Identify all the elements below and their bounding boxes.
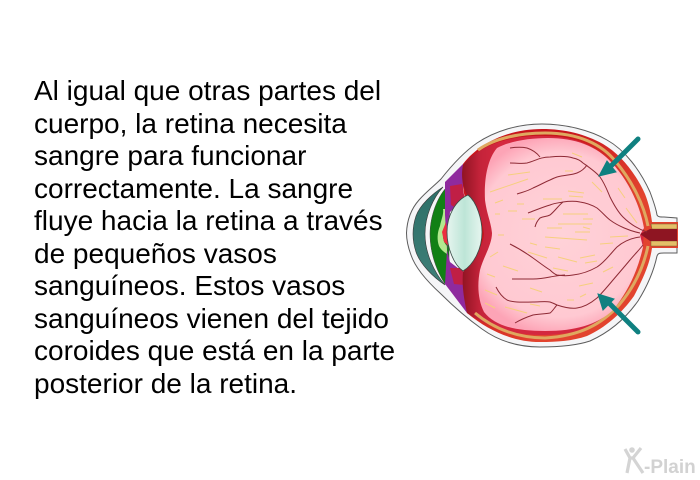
- lens: [447, 195, 482, 271]
- body text paragraph: de pequeños vasos: [34, 238, 277, 268]
- fatty yellow streaks: [485, 153, 637, 313]
- ciliary body purple: [445, 164, 467, 313]
- lower ciliary muscle: [450, 268, 464, 285]
- X-Plain logo: [624, 447, 696, 478]
- outer red choroid layer: [463, 129, 678, 342]
- red pupil edge: [442, 222, 449, 246]
- cornea teal: [413, 187, 445, 285]
- retina pink interior: [478, 138, 644, 331]
- iris green: [430, 189, 449, 284]
- X-Plain logo: -Plain: [644, 457, 696, 478]
- body text paragraph: correctamente. La sangre: [34, 172, 353, 204]
- upper ciliary muscle: [450, 184, 465, 208]
- optic nerve yellow sheath: [651, 224, 677, 229]
- body text paragraph: sangre para funcionar: [34, 140, 306, 171]
- lower teal arrow: [598, 294, 638, 332]
- iris light frill: [438, 209, 447, 254]
- body text paragraph: fluye hacia la retina a través: [34, 205, 383, 236]
- crimson inner layer: [462, 136, 644, 335]
- body text paragraph: sanguíneos vienen del tejido: [34, 302, 389, 334]
- retinal blood vessels: [496, 147, 647, 323]
- orange band: [475, 133, 648, 338]
- optic nerve core: [640, 229, 677, 241]
- body text paragraph: sanguíneos. Estos vasos: [34, 270, 345, 301]
- body text paragraph: posterior de la retina.: [34, 368, 297, 398]
- body text paragraph: [34, 75, 395, 399]
- upper teal arrow: [599, 139, 638, 176]
- body text paragraph: coroides que está en la parte: [34, 335, 395, 366]
- body text paragraph: cuerpo, la retina necesita: [34, 108, 347, 138]
- body text paragraph: Al igual que otras partes del: [34, 75, 381, 106]
- sclera outer shell: [406, 124, 678, 347]
